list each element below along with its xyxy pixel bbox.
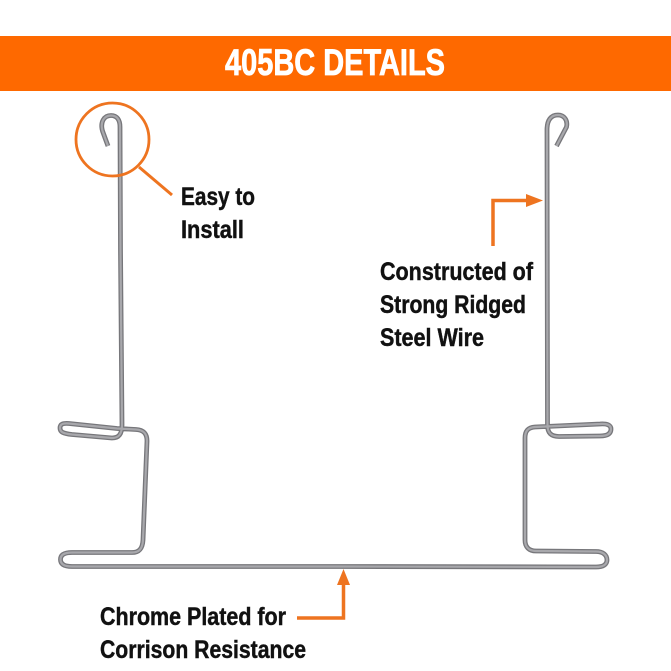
callout: steel wire <box>380 194 543 352</box>
title text: 405BC DETAILS <box>225 42 445 83</box>
title banner <box>0 36 671 91</box>
label text <box>100 603 306 664</box>
highlight circle <box>76 103 149 176</box>
label text: Chrome Plated for <box>100 603 286 631</box>
chrome wire hanger <box>60 115 611 567</box>
label text: Corrison Resistance <box>100 636 306 664</box>
leader line <box>139 167 172 195</box>
label text <box>181 183 255 244</box>
label text: Steel Wire <box>380 324 484 352</box>
callout: chrome plated <box>100 569 350 664</box>
label text: Easy to <box>181 183 255 211</box>
label text: Strong Ridged <box>380 291 526 319</box>
label text: Install <box>181 216 244 244</box>
arrow pointing to wire <box>297 569 350 618</box>
label text: Constructed of <box>380 258 534 286</box>
arrow pointing to wire <box>493 194 543 246</box>
callout: easy to install <box>76 103 255 244</box>
label text <box>380 258 534 352</box>
